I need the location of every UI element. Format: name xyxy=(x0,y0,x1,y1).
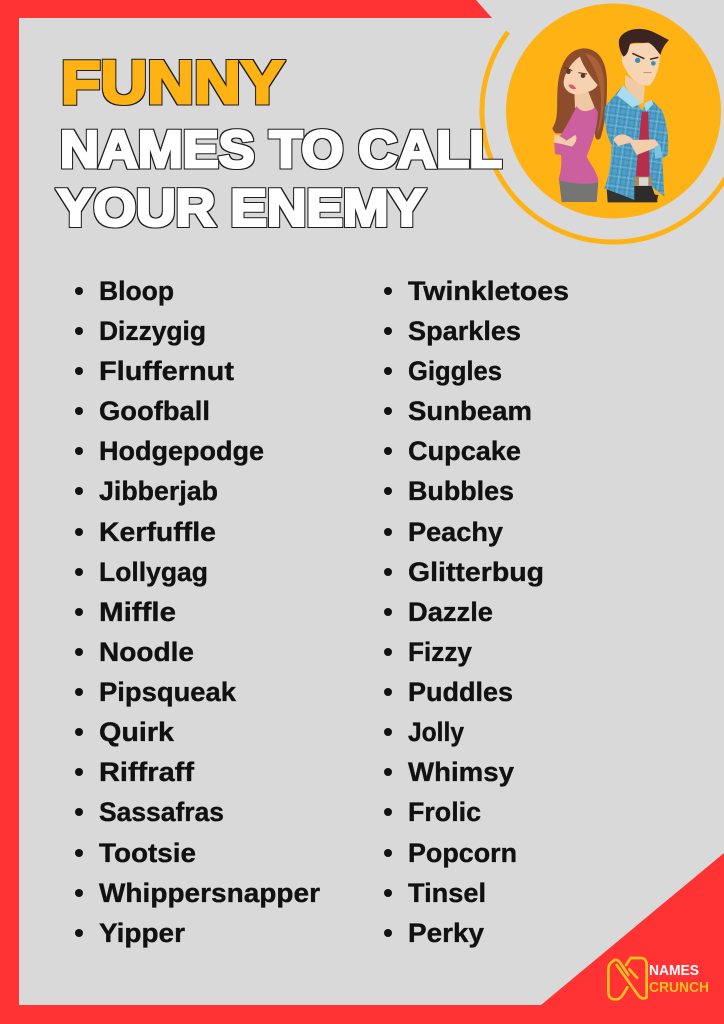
man xyxy=(604,29,669,202)
names list: right column: Frolic xyxy=(408,797,481,827)
names list: left column: Whippersnapper xyxy=(99,878,320,908)
names list: left column: Tootsie xyxy=(99,838,196,868)
names list: right column: Sparkles xyxy=(408,316,521,346)
names list: left column: Hodgepodge xyxy=(99,436,264,466)
names list: right column: Whimsy xyxy=(408,757,514,787)
title xyxy=(57,49,502,238)
names list: right column: Fizzy xyxy=(408,637,472,667)
names list: left column: Goofball xyxy=(99,396,210,426)
names list: left column: Yipper xyxy=(99,918,185,948)
names list: right column: Giggles xyxy=(408,356,502,386)
names list: right column: Cupcake xyxy=(408,436,521,466)
names list: left column: Lollygag xyxy=(99,557,208,587)
names list: right column: Jolly xyxy=(408,717,464,747)
names list: right column: Twinkletoes xyxy=(408,276,569,306)
icon: N monogram xyxy=(608,958,647,999)
names list: right column: Popcorn xyxy=(408,838,517,868)
names list: left column: Dizzygig xyxy=(99,316,206,346)
names list: left column: Miffle xyxy=(99,597,176,627)
illustration circle xyxy=(506,4,721,218)
icon: arguing couple xyxy=(552,29,669,202)
names list: right column: Peachy xyxy=(408,517,503,547)
decorative ring around illustration xyxy=(482,32,724,242)
bullets xyxy=(75,287,83,937)
logo: Names Crunch xyxy=(608,958,709,999)
names list: right column: Glitterbug xyxy=(408,557,544,587)
logo word: NAMES: NAMES xyxy=(649,962,699,979)
names list: right column: Dazzle xyxy=(408,597,493,627)
names list: left column: Kerfuffle xyxy=(99,517,216,547)
bullets xyxy=(384,287,392,937)
title line: NAMES TO CALL: NAMES TO CALL xyxy=(60,121,502,179)
names list: left column: Sassafras xyxy=(99,797,224,827)
names list: left column: Noodle xyxy=(99,637,194,667)
names list: right column: Tinsel xyxy=(408,878,486,908)
names list: left column xyxy=(75,276,320,948)
names list: left column: Quirk xyxy=(99,717,175,747)
names list: left column: Bloop xyxy=(99,276,174,306)
names list: right column: Perky xyxy=(408,918,484,948)
names list: right column: Puddles xyxy=(408,677,513,707)
logo word: CRUNCH: CRUNCH xyxy=(649,979,709,996)
names list: left column: Pipsqueak xyxy=(99,677,237,707)
names list: right column: Sunbeam xyxy=(408,396,532,426)
names list: left column: Fluffernut xyxy=(99,356,234,386)
title line: FUNNY: FUNNY xyxy=(61,49,284,116)
names list: left column: Riffraff xyxy=(99,757,195,787)
title line: YOUR ENEMY: YOUR ENEMY xyxy=(57,180,425,238)
names list: right column: Bubbles xyxy=(408,476,514,506)
woman xyxy=(552,48,607,202)
names list: right column xyxy=(384,276,569,948)
names list: left column: Jibberjab xyxy=(99,476,218,506)
